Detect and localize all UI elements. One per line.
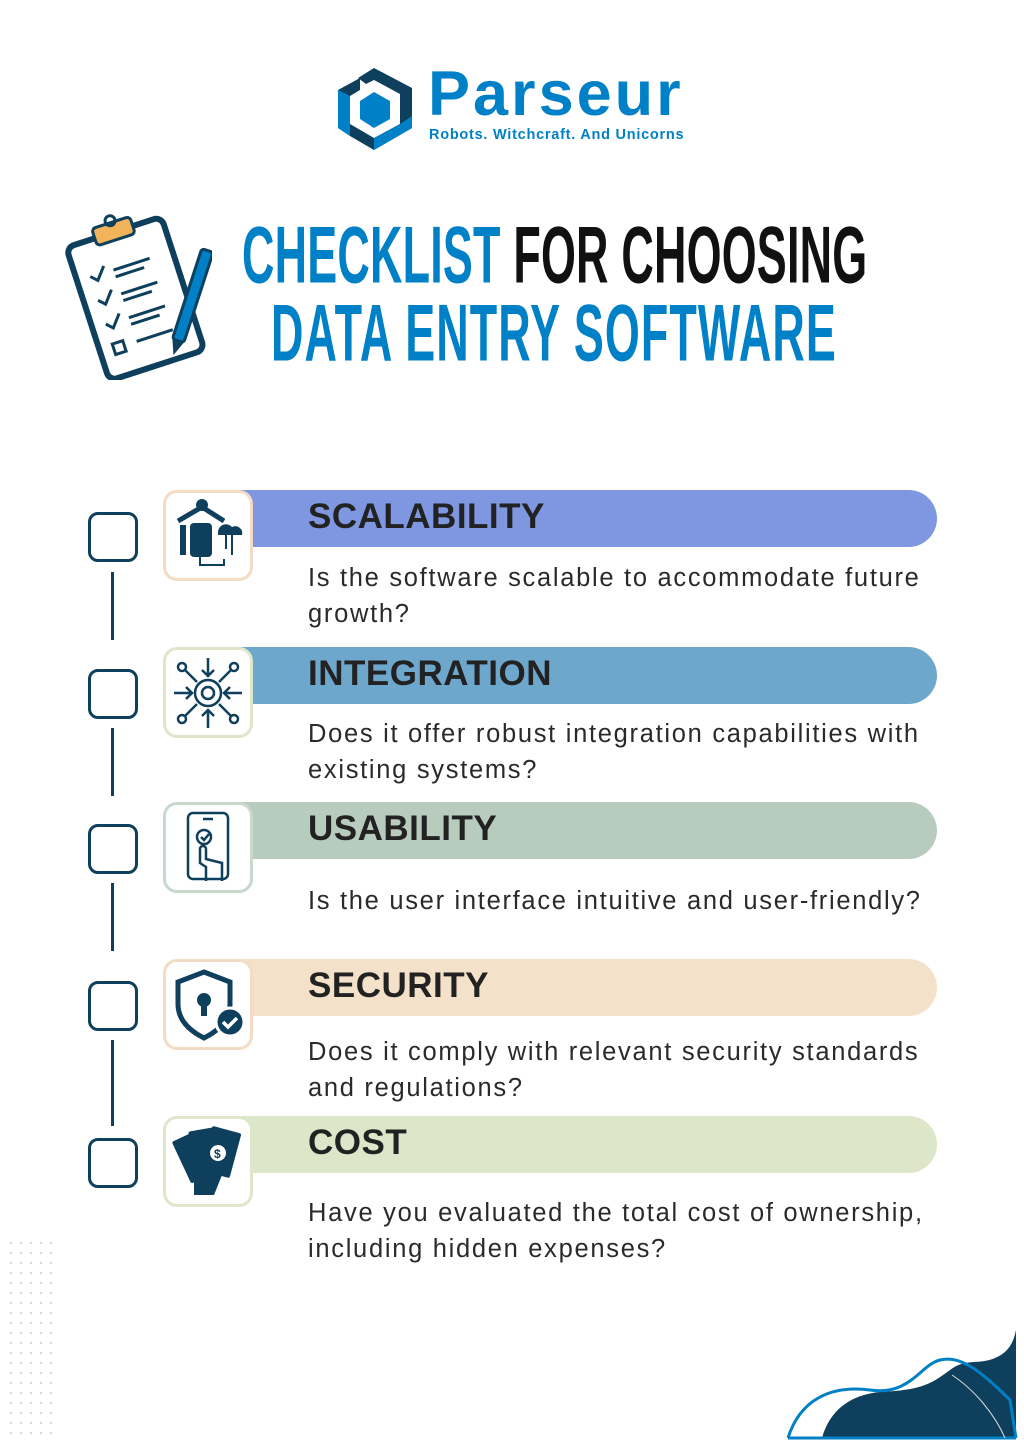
item: security <box>88 959 937 1050</box>
decorative wave <box>786 1330 1018 1440</box>
logo: Parseur <box>428 59 684 129</box>
timeline connectors <box>111 572 114 640</box>
text: INTEGRATION <box>308 654 552 693</box>
logo: Robots. Witchcraft. And Unicorns <box>429 127 684 143</box>
text: Is the software scalable to accommodate future growth? <box>308 564 921 628</box>
title <box>242 209 867 377</box>
text: Does it offer robust integration capabilities with existing systems? <box>308 720 920 784</box>
icon: shield <box>163 959 253 1050</box>
icon: phone touch <box>163 802 253 893</box>
text: Does it comply with relevant security standards and regulations? <box>308 1038 919 1102</box>
icon: server house <box>163 490 253 581</box>
title: DATA ENTRY SOFTWARE <box>271 287 837 377</box>
text: Have you evaluated the total cost of ownership, including hidden expenses? <box>308 1199 924 1263</box>
item: scalability <box>88 490 937 581</box>
text: USABILITY <box>308 809 497 848</box>
icon: gear arrows <box>163 647 253 738</box>
item: usability <box>88 802 937 893</box>
icon: money hand: $ <box>214 1147 221 1161</box>
text: Is the user interface intuitive and user-friendly? <box>308 887 922 915</box>
logo <box>338 59 684 150</box>
icon: clipboard <box>65 214 212 380</box>
text: SCALABILITY <box>308 497 545 536</box>
item: integration <box>88 647 937 738</box>
title: CHECKLIST FOR CHOOSING <box>242 209 867 299</box>
text: SECURITY <box>308 966 489 1005</box>
item: cost <box>88 1116 937 1207</box>
text: COST <box>308 1123 407 1162</box>
icon: money hand <box>163 1116 253 1207</box>
decorative dots <box>10 1242 52 1434</box>
